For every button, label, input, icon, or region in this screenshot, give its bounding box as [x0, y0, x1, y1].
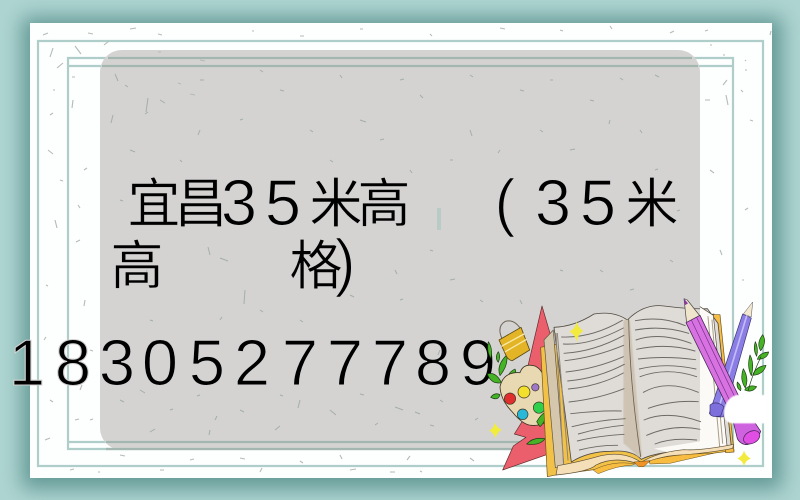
icon: yellow sparkle left: [489, 423, 502, 438]
icon: laurel left: [487, 342, 516, 399]
icon: purple pencil: [684, 299, 762, 447]
icon: yellow sparkle on book: [569, 322, 583, 342]
icon: blue pencil: [709, 302, 753, 417]
phone number: 7: [327, 326, 363, 399]
illustration: book and school supplies: [487, 299, 769, 477]
pages area over white: [654, 307, 727, 452]
title text: 米: [310, 175, 362, 234]
book lines right page: [635, 319, 701, 444]
book back cover: [541, 314, 734, 477]
title text: [110, 166, 678, 298]
book pages: [554, 306, 731, 462]
title text: ): [334, 226, 356, 298]
icon: palette: [500, 365, 545, 425]
white erased patch: [724, 395, 767, 423]
icon: yellow sparkle right: [737, 451, 751, 466]
icon: red set square: [503, 306, 551, 470]
grey title panel: [100, 50, 700, 450]
book bottom edge: [556, 444, 734, 475]
phone number: 9: [460, 326, 496, 399]
phone number: [9, 326, 496, 399]
icon: laurel right: [737, 335, 769, 391]
phone number: 7: [282, 326, 318, 399]
title text: 米: [626, 175, 678, 234]
title text: (: [494, 166, 516, 238]
title text: 5: [265, 166, 301, 239]
title text: 格: [290, 237, 342, 296]
title text: 高: [110, 237, 164, 296]
book lines left page: [562, 320, 625, 450]
icon: padlock: [499, 321, 530, 361]
phone number: 1: [9, 326, 45, 399]
phone number: 0: [142, 326, 178, 399]
book page stack left: [544, 330, 564, 468]
title text: 宜: [128, 175, 180, 234]
phone number: 2: [234, 326, 270, 399]
panel frame lines: [102, 58, 698, 449]
phone number: 3: [99, 326, 135, 399]
book spine shading: [623, 320, 642, 457]
inner frame line: [68, 58, 733, 449]
outer frame line: [38, 41, 763, 466]
title text: 3: [221, 166, 257, 239]
phone number: 5: [189, 326, 225, 399]
title text: 3: [535, 166, 571, 239]
title text: 5: [580, 166, 616, 239]
phone number: 7: [372, 326, 408, 399]
faint panel mark: [437, 208, 441, 230]
title text: 昌: [174, 175, 228, 234]
phone number: 8: [55, 326, 91, 399]
title text: 高: [358, 175, 410, 234]
phone number: 8: [415, 326, 451, 399]
leaf under palette: [527, 412, 546, 444]
